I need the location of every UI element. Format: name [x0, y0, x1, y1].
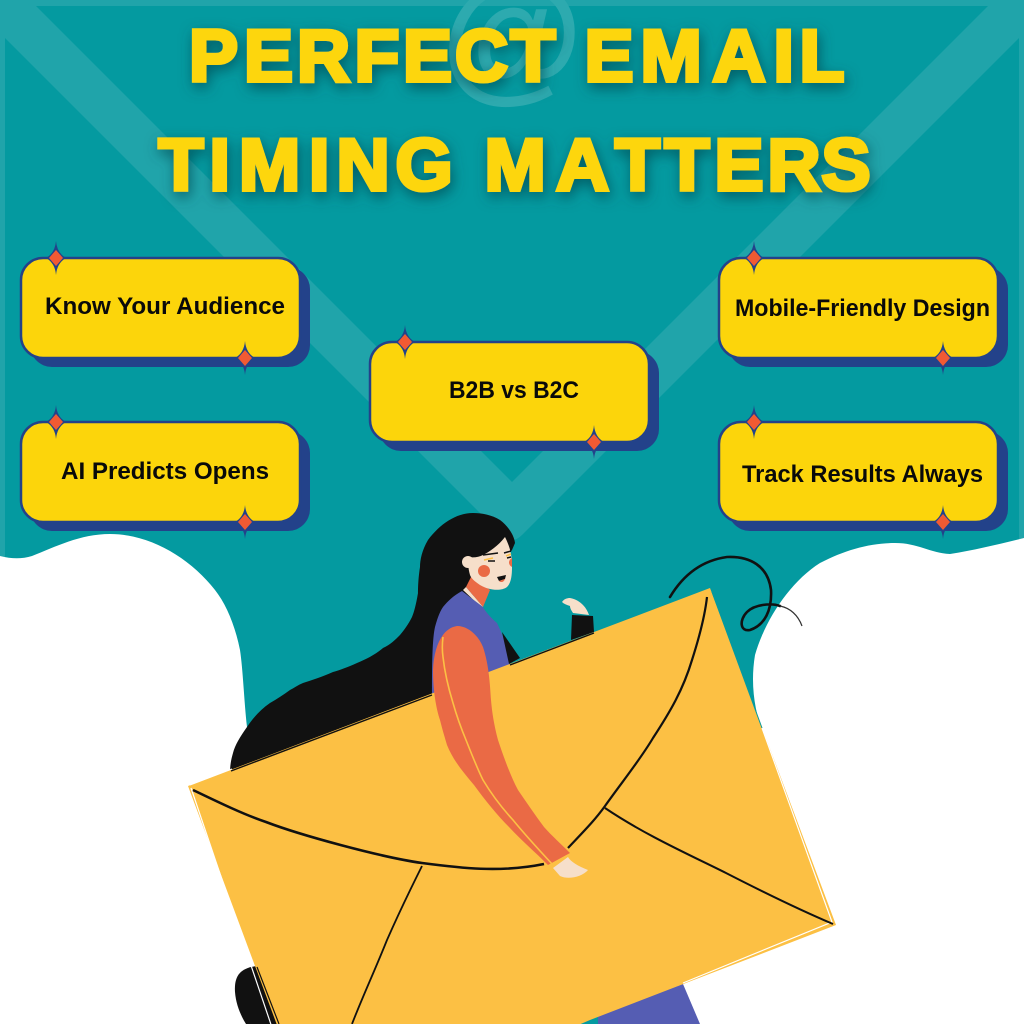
title [158, 14, 871, 206]
card: Mobile-Friendly Design: Mobile-Friendly Design [735, 295, 990, 322]
card: AI Predicts Opens [21, 405, 310, 539]
black sleeve [571, 615, 594, 640]
scribble line [670, 557, 780, 630]
black collar piece [502, 632, 520, 664]
right cheek [509, 558, 512, 567]
top edge line [231, 633, 594, 771]
card: B2B vs B2C: B2B vs B2C [449, 377, 579, 404]
sleeve [433, 626, 570, 865]
black foot [235, 966, 285, 1024]
large yellow envelope [188, 588, 836, 1024]
eyes and brows [483, 551, 511, 561]
raised hand [562, 598, 589, 615]
inner white edge lines [190, 728, 832, 1024]
lower right fold [605, 808, 833, 924]
purple top [432, 591, 510, 695]
hand [553, 857, 588, 878]
ear [462, 556, 474, 568]
envelope body [188, 588, 836, 1024]
envelope line pattern [0, 0, 1024, 570]
card: Know Your Audience: Know Your Audience [45, 293, 285, 320]
card: Track Results Always: Track Results Always [742, 461, 983, 488]
white cloud shapes [0, 534, 1024, 1024]
neck [466, 575, 490, 607]
lower lip [499, 579, 505, 582]
card: Know Your Audience [21, 241, 310, 375]
eyeshadow [484, 554, 511, 560]
lower left fold [352, 866, 422, 1024]
flap curve [193, 790, 544, 869]
mouth [497, 575, 506, 581]
long black hair [230, 513, 515, 775]
sleeve stripe [442, 637, 553, 865]
flap curve right [568, 597, 707, 848]
card: Mobile-Friendly Design [719, 241, 1008, 375]
left edge line [257, 967, 279, 1024]
left cheek [478, 565, 490, 577]
card: Track Results Always [719, 405, 1008, 539]
inner teal edge line [712, 592, 762, 728]
blue trousers [598, 984, 700, 1024]
orange arm with hand [433, 626, 588, 878]
card: B2B vs B2C [370, 325, 659, 459]
woman illustration [230, 513, 802, 1024]
title: TIMING MATTERS [158, 123, 871, 206]
collar [463, 587, 483, 607]
face [468, 537, 512, 590]
title: PERFECT EMAIL [189, 14, 844, 97]
card: AI Predicts Opens: AI Predicts Opens [61, 458, 269, 485]
